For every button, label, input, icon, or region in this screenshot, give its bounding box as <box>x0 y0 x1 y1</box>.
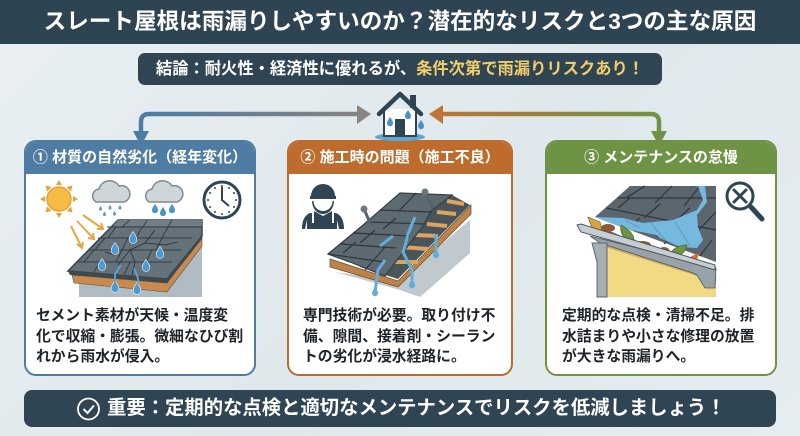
panel text: construction problems: 専門技術が必要。取り付け不 <box>303 308 495 324</box>
illustration: clogged gutter <box>577 186 716 297</box>
panel text: material degradation: 化で収縮・膨張。微細なひび割 <box>36 329 243 345</box>
title: スレート屋根は雨漏りしやすいのか？潜在的なリスクと3つの主な原因 <box>44 9 756 34</box>
panel text: neglected maintenance: 水詰まりや小さな修理の放置 <box>562 329 754 345</box>
panel heading: construction problems: ② 施工時の問題（施工不良） <box>300 149 500 166</box>
panel text: material degradation <box>36 307 243 365</box>
panel text: neglected maintenance: が大きな雨漏りへ。 <box>562 349 695 365</box>
panel text: construction problems: トの劣化が浸水経路に。 <box>303 349 466 365</box>
panel text: neglected maintenance <box>562 307 754 365</box>
icon: magnifying glass with cross <box>727 183 762 219</box>
icon: house with water leak <box>375 94 425 141</box>
illustration: cracked slate roof <box>68 220 202 297</box>
illustration: roof with installation gaps <box>328 188 471 297</box>
bottom message bar: 重要：定期的な点検と適切なメンテナンスでリスクを低減しましょう！ <box>107 397 726 419</box>
icon: check mark <box>78 398 99 420</box>
panel text: neglected maintenance: 定期的な点検・清掃不足。排 <box>562 308 754 324</box>
icon: construction worker <box>302 184 344 229</box>
panel heading: material degradation: ① 材質の自然劣化（経年変化） <box>33 149 247 166</box>
bottom message bar <box>24 390 776 427</box>
panel text: material degradation: セメント素材が天候・温度変 <box>36 308 228 324</box>
panel heading: neglected maintenance <box>547 142 775 174</box>
icon: clock <box>204 182 240 218</box>
conclusion banner <box>138 53 662 85</box>
panel heading: material degradation <box>26 142 254 174</box>
title <box>0 0 800 44</box>
icon: sunlight arrows <box>71 215 103 248</box>
panel text: construction problems: 備、隙間、接着剤・シーラン <box>303 329 495 345</box>
arrow: panel 2 to house, continuing to panel 3 <box>429 105 667 146</box>
icon: sun <box>40 180 78 218</box>
panel text: material degradation: れから雨水が侵入。 <box>36 349 169 365</box>
arrow: house to panel 1 <box>133 105 371 146</box>
panel: neglected maintenance <box>545 140 777 376</box>
panel heading: construction problems <box>289 142 511 174</box>
panel: material degradation <box>24 140 256 376</box>
panel: construction problems <box>287 140 513 376</box>
conclusion banner: 結論：耐火性・経済性に優れるが、条件次第で雨漏りリスクあり！ <box>156 60 644 78</box>
icon: rain clouds <box>93 181 183 216</box>
panel text: construction problems <box>303 307 495 365</box>
panel heading: neglected maintenance: ③ メンテナンスの怠慢 <box>584 149 738 166</box>
